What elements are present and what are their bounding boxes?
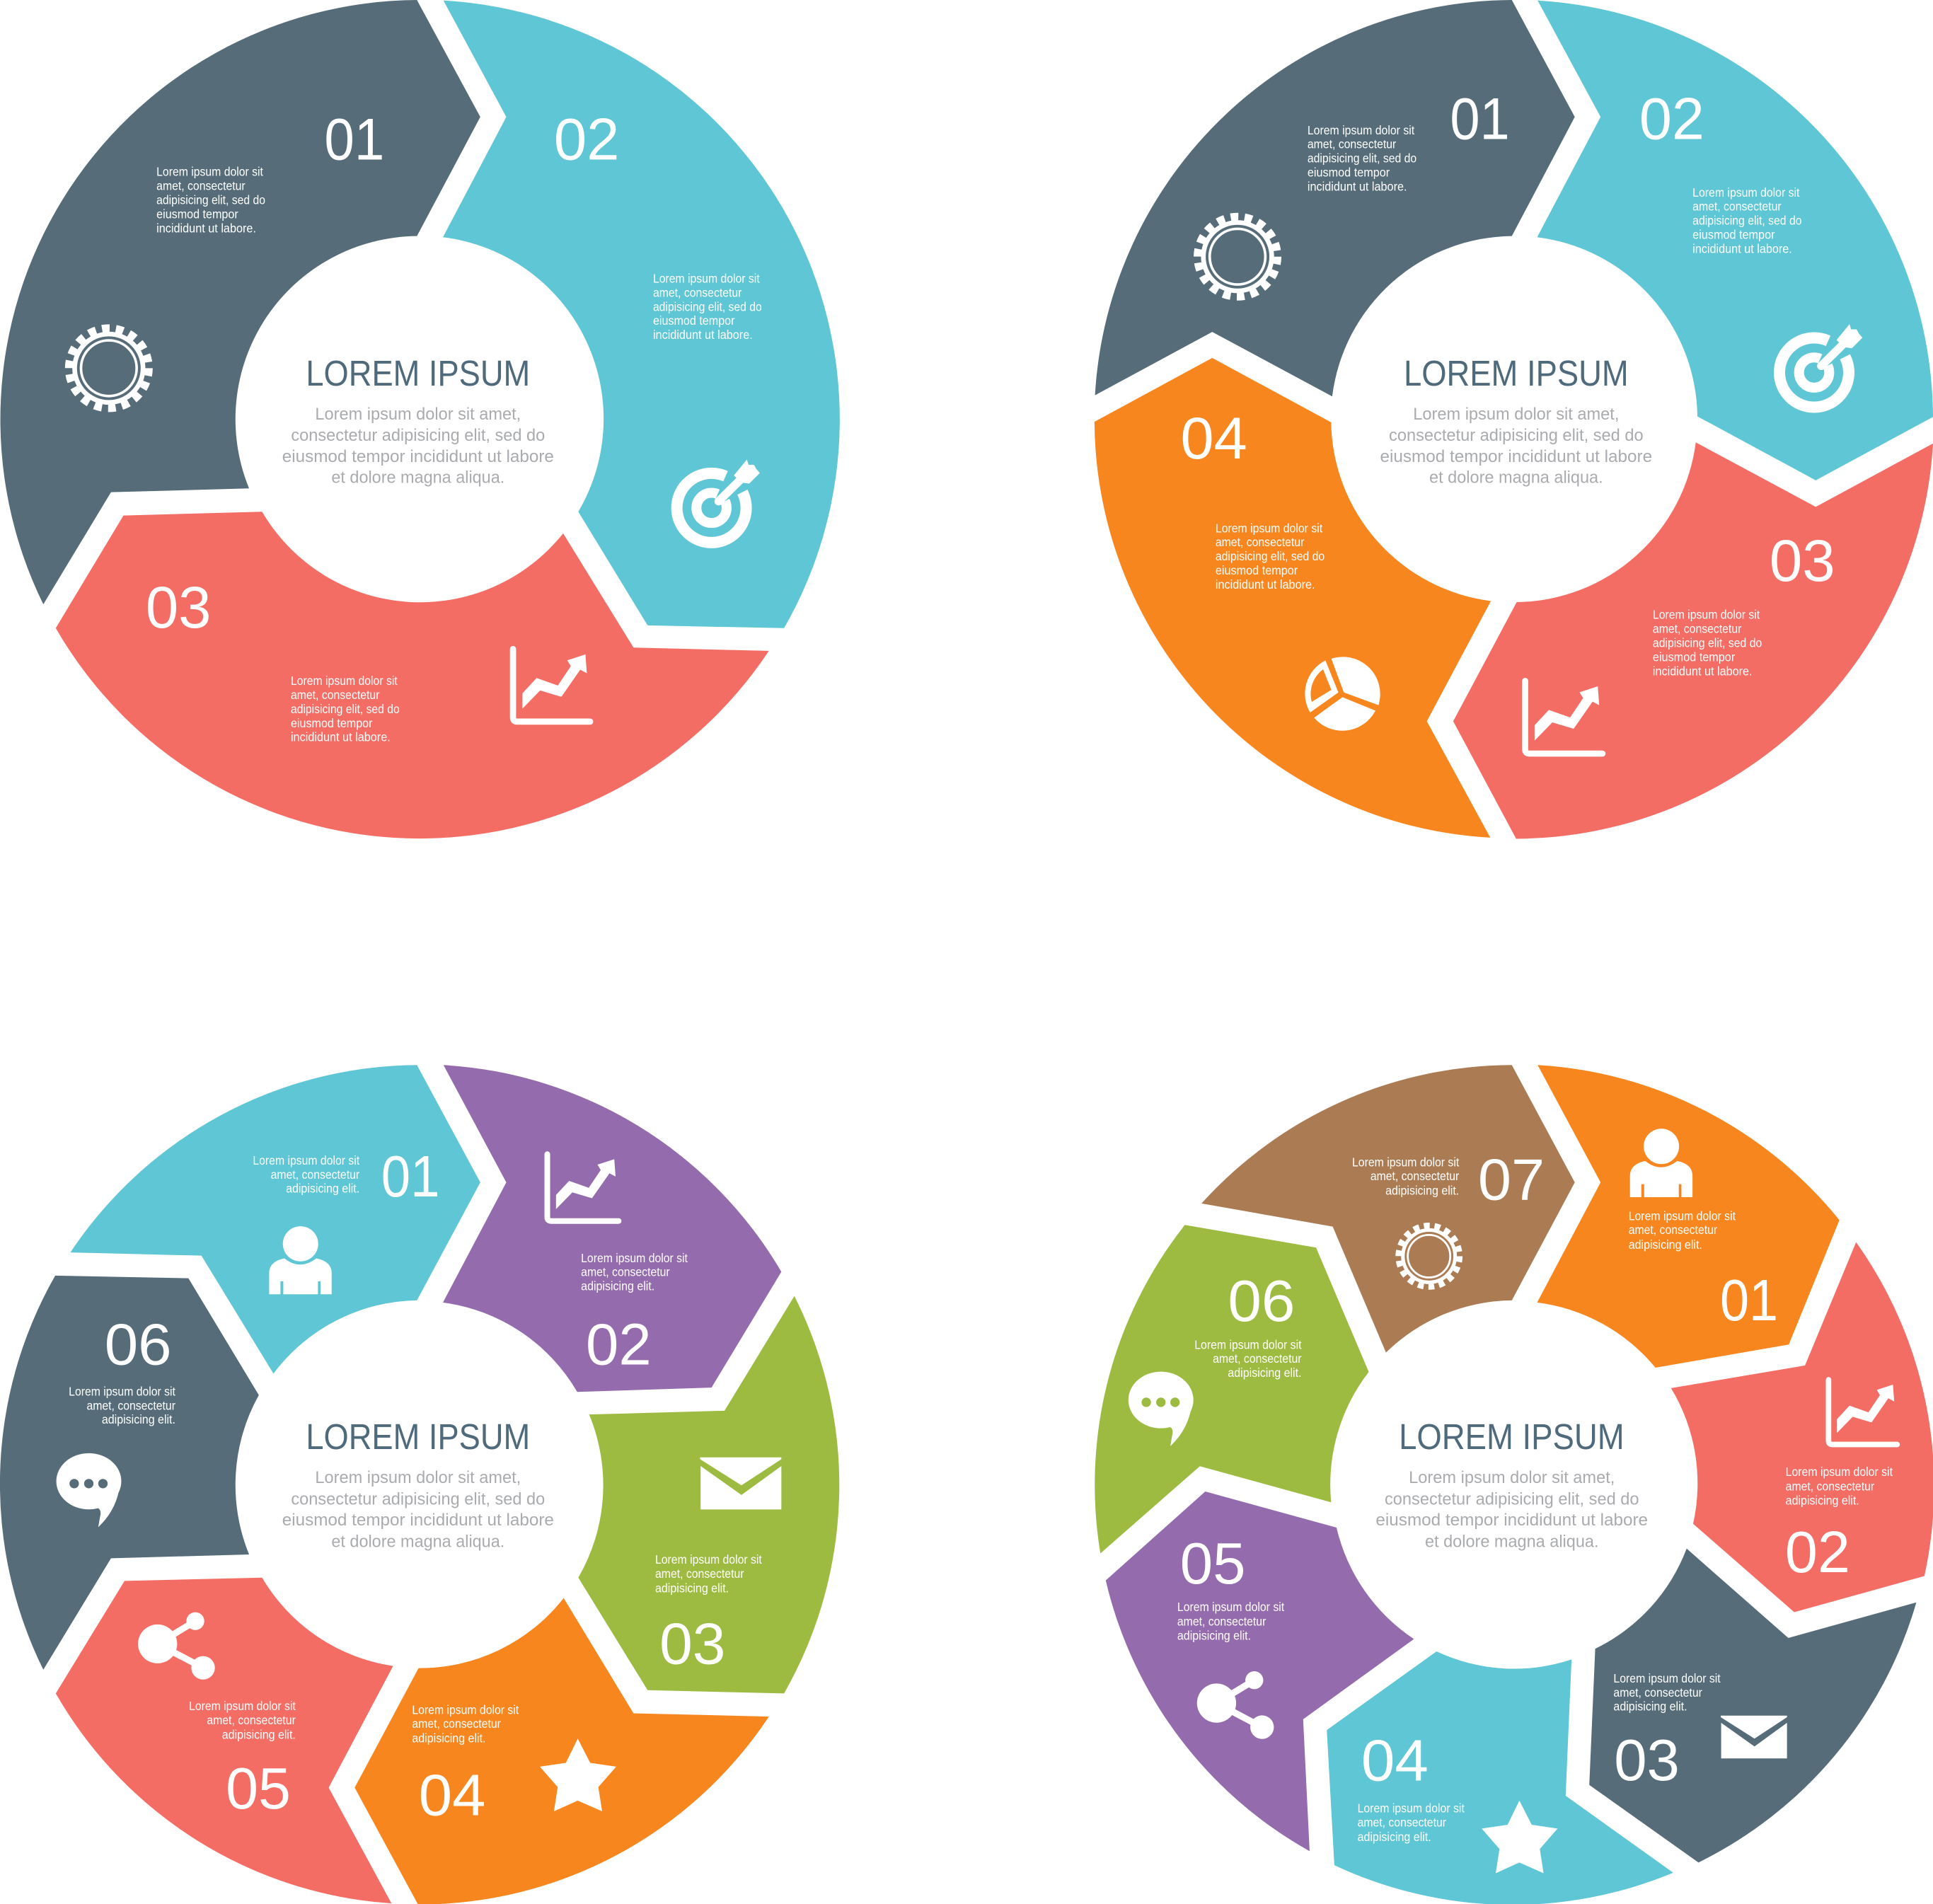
segment 01 dark [1095,0,1575,396]
segment 05 red [56,1578,393,1903]
icon: speech bubble [57,1453,121,1527]
text block 05: adipisicing elit. [1177,1628,1251,1642]
number 03: 03 [1770,528,1835,594]
text block 01: eiusmod tempor [156,207,238,221]
text block 06: adipisicing elit. [1228,1366,1302,1380]
center body text: eiusmod tempor incididunt ut labore [282,448,554,466]
text block 04: amet, consectetur [1358,1815,1446,1829]
text block 02: eiusmod tempor [653,313,735,328]
text block 06: adipisicing elit. [102,1412,175,1426]
text block 07: Lorem ipsum dolor sit [1352,1155,1459,1169]
number 03: 03 [146,574,211,640]
icon: envelope [700,1458,781,1509]
text block 03: amet, consectetur [1653,622,1742,636]
segment 04 teal [1327,1651,1673,1904]
text block 02: amet, consectetur [1786,1479,1874,1493]
icon: gear [1197,217,1278,296]
text block 04 [1216,521,1325,592]
text block 07: amet, consectetur [1371,1169,1459,1183]
text block 03 [291,674,400,744]
number 04: 04 [1180,405,1247,471]
text block 03: amet, consectetur [655,1567,744,1581]
text block 06 [69,1385,175,1426]
center text [282,353,554,487]
shape: segment 07 [1201,1065,1575,1353]
text block 03: amet, consectetur [291,688,380,702]
number 01: 01 [1450,86,1510,152]
shape: segment 04 [1095,358,1491,838]
text block 03: Lorem ipsum dolor sit [1613,1671,1721,1685]
icon: pie chart [1305,657,1380,731]
text block 06: amet, consectetur [86,1398,175,1412]
text block 01 [156,165,265,235]
number 06: 06 [1228,1268,1295,1334]
shape: segment 04 [1327,1651,1673,1904]
text block 02: adipisicing elit. [1786,1493,1859,1507]
icon: share [138,1612,215,1680]
text block 01: incididunt ut labore. [156,221,256,235]
text block 01 [1629,1208,1736,1252]
segment 06 green [1095,1225,1369,1554]
text block 02 [581,1251,688,1293]
title: LOREM IPSUM [1399,1417,1625,1457]
segment 04 orange [1095,358,1491,838]
icon: line chart [1525,681,1603,754]
center body text: eiusmod tempor incididunt ut labore [1375,1511,1648,1529]
segment 02 teal [443,1,840,628]
text block 01: amet, consectetur [1308,137,1396,151]
text block 01: Lorem ipsum dolor sit [1308,123,1414,137]
text block 02: Lorem ipsum dolor sit [653,271,760,285]
icon: speech bubble [1129,1372,1194,1446]
text block 05 [189,1699,296,1741]
text block 05: amet, consectetur [207,1713,296,1727]
shape: segment 05 [56,1578,393,1903]
shape: segment 03 [56,512,769,838]
shape: segment 05 [1106,1492,1414,1851]
icon: person [1630,1129,1692,1197]
center body text [282,1469,554,1551]
text block 04 [1358,1801,1465,1844]
center body text: et dolore magna aliqua. [1425,1532,1599,1550]
text block 02: amet, consectetur [581,1265,670,1279]
text block 02: incididunt ut labore. [653,328,753,342]
text block 02: Lorem ipsum dolor sit [1786,1465,1893,1479]
center body text: et dolore magna aliqua. [331,469,504,487]
text block 01: amet, consectetur [156,179,246,193]
text block 03 [1613,1671,1721,1714]
segment 02 red [1671,1242,1933,1612]
text block 04: Lorem ipsum dolor sit [1216,521,1322,535]
text block 01: adipisicing elit. [286,1182,359,1196]
text block 04: Lorem ipsum dolor sit [1358,1801,1465,1816]
text block 04: amet, consectetur [412,1717,501,1731]
segment 03 red [1453,442,1933,838]
number 03: 03 [1614,1727,1680,1793]
text block 01: Lorem ipsum dolor sit [156,165,263,179]
icon: line chart [1828,1380,1897,1445]
segment 03 red [56,512,769,838]
text block 02: amet, consectetur [653,285,742,299]
text block 03 [1653,608,1762,678]
center body text: Lorem ipsum dolor sit amet, [315,405,521,424]
segment 03 dark [1589,1549,1916,1862]
text block 01: amet, consectetur [271,1167,359,1182]
text block 01: incididunt ut labore. [1308,179,1407,193]
segment 02 teal [1537,1,1933,480]
text block 03: amet, consectetur [1613,1685,1702,1700]
text block 04: incididunt ut labore. [1216,577,1315,592]
number 02: 02 [554,106,620,173]
text block 02 [1692,185,1802,255]
text block 01: adipisicing elit, sed do [1308,151,1416,166]
segment 01 teal [70,1065,480,1373]
text block 05: Lorem ipsum dolor sit [1177,1600,1284,1614]
shape: segment 02 [443,1,840,628]
text block 01: Lorem ipsum dolor sit [1629,1208,1736,1223]
text block 03: Lorem ipsum dolor sit [1653,608,1760,622]
text block 04: Lorem ipsum dolor sit [412,1702,519,1717]
text block 03: Lorem ipsum dolor sit [291,674,398,688]
title: LOREM IPSUM [1404,353,1629,393]
segment 04 orange [354,1598,769,1904]
text block 03 [655,1552,762,1595]
text block 03: adipisicing elit, sed do [291,702,400,716]
text block 04: adipisicing elit. [412,1731,485,1746]
text block 02: adipisicing elit. [581,1279,654,1293]
text block 01 [253,1153,359,1196]
number 02: 02 [1639,86,1704,152]
shape: segment 02 [443,1065,781,1392]
center body text: eiusmod tempor incididunt ut labore [1380,448,1652,466]
text block 03: Lorem ipsum dolor sit [655,1552,762,1567]
center text [1380,353,1652,487]
number 05: 05 [226,1755,291,1821]
icon: gear [69,328,149,408]
panel: seven-step cycle [1095,1065,1933,1904]
text block 01: eiusmod tempor [1308,165,1390,180]
text block 01: adipisicing elit, sed do [156,193,265,207]
text block 04: eiusmod tempor [1216,563,1298,577]
text block 02: adipisicing elit, sed do [653,299,762,313]
number 02: 02 [586,1312,652,1377]
text block 03: eiusmod tempor [1653,650,1735,664]
title: LOREM IPSUM [306,353,530,393]
icon: target [677,460,760,543]
text block 02: Lorem ipsum dolor sit [581,1251,688,1265]
icon: person [269,1226,332,1294]
text block 06: Lorem ipsum dolor sit [69,1385,175,1399]
icon: star [540,1738,616,1811]
text block 02: amet, consectetur [1692,200,1782,214]
text block 06 [1194,1337,1302,1380]
text block 05 [1177,1600,1284,1642]
shape: segment 01 [1537,1065,1840,1368]
icon: line chart [513,649,590,722]
icon: target [1779,324,1862,408]
text block 04: amet, consectetur [1216,535,1304,549]
text block 02: adipisicing elit, sed do [1692,214,1802,228]
text block 03: eiusmod tempor [291,716,373,730]
segment 07 brown [1201,1065,1575,1353]
number 03: 03 [659,1611,726,1676]
center body text: et dolore magna aliqua. [1429,469,1603,487]
text block 02: Lorem ipsum dolor sit [1692,185,1800,200]
icon: star [1482,1801,1557,1874]
segment 01 orange [1537,1065,1840,1368]
number 05: 05 [1180,1530,1245,1596]
center body text: Lorem ipsum dolor sit amet, [315,1469,521,1487]
panel: three-step cycle [0,0,840,838]
number 01: 01 [1720,1267,1778,1333]
text block 06: Lorem ipsum dolor sit [1194,1337,1302,1351]
center body text: consectetur adipisicing elit, sed do [1385,1489,1639,1508]
icon: line chart [547,1154,618,1221]
text block 01: amet, consectetur [1629,1223,1717,1237]
text block 04: adipisicing elit. [1358,1830,1431,1844]
shape: segment 02 [1671,1242,1933,1612]
text block 04: adipisicing elit, sed do [1216,549,1325,563]
segment 02 purple [443,1065,781,1392]
segment 03 green [578,1296,839,1693]
text block 02 [1786,1465,1893,1507]
title: LOREM IPSUM [306,1417,530,1457]
shape: segment 03 [1589,1549,1916,1862]
text block 02 [653,271,762,342]
text block 07 [1352,1155,1459,1198]
text block 02: eiusmod tempor [1692,227,1775,242]
shape: segment 03 [1453,442,1933,838]
center body text: Lorem ipsum dolor sit amet, [1413,405,1619,424]
panel: four-step cycle [1095,0,1933,838]
number 04: 04 [1361,1728,1429,1794]
text block 02: incididunt ut labore. [1692,241,1792,255]
shape: segment 04 [354,1598,769,1904]
shape: segment 01 [70,1065,480,1373]
text block 03: adipisicing elit. [1613,1700,1687,1714]
text block 03: incididunt ut labore. [1653,664,1753,678]
icon: gear [1398,1225,1460,1287]
text block 03: adipisicing elit, sed do [1653,635,1762,650]
number 01: 01 [324,106,384,173]
center text [1375,1417,1648,1550]
shape: segment 02 [1537,1,1933,480]
number 07: 07 [1478,1146,1545,1213]
center body text: eiusmod tempor incididunt ut labore [282,1511,554,1530]
text block 03: incididunt ut labore. [291,730,391,744]
number 06: 06 [105,1312,172,1377]
icon: envelope [1721,1716,1787,1758]
center body text [1380,405,1652,487]
center body text: consectetur adipisicing elit, sed do [291,427,545,445]
center body text: Lorem ipsum dolor sit amet, [1409,1468,1615,1487]
text block 03: adipisicing elit. [655,1581,729,1595]
center body text [1375,1468,1648,1550]
text block 05: Lorem ipsum dolor sit [189,1699,296,1713]
shape: segment 06 [0,1276,259,1670]
text block 01: adipisicing elit. [1629,1237,1702,1252]
number 02: 02 [1785,1519,1850,1585]
panel: six-step cycle [0,1065,839,1904]
text block 06: amet, consectetur [1213,1351,1302,1366]
shape: segment 01 [1095,0,1575,396]
center body text: et dolore magna aliqua. [331,1533,504,1551]
segment 05 purple [1106,1492,1414,1851]
center text [282,1417,554,1551]
text block 05: amet, consectetur [1177,1614,1266,1628]
center body text [282,405,554,487]
number 04: 04 [419,1762,485,1828]
text block 01 [1308,123,1416,193]
number 01: 01 [381,1143,439,1209]
text block 04 [412,1702,519,1746]
text block 05: adipisicing elit. [222,1727,296,1741]
center body text: consectetur adipisicing elit, sed do [291,1490,545,1508]
segment 06 dark [0,1276,259,1670]
center body text: consectetur adipisicing elit, sed do [1389,427,1644,445]
segment 01 dark [0,0,480,604]
icon: share [1197,1671,1274,1739]
shape: segment 06 [1095,1225,1369,1554]
shape: segment 03 [578,1296,839,1693]
text block 07: adipisicing elit. [1385,1184,1459,1198]
shape: segment 01 [0,0,480,604]
text block 01: Lorem ipsum dolor sit [253,1153,359,1167]
